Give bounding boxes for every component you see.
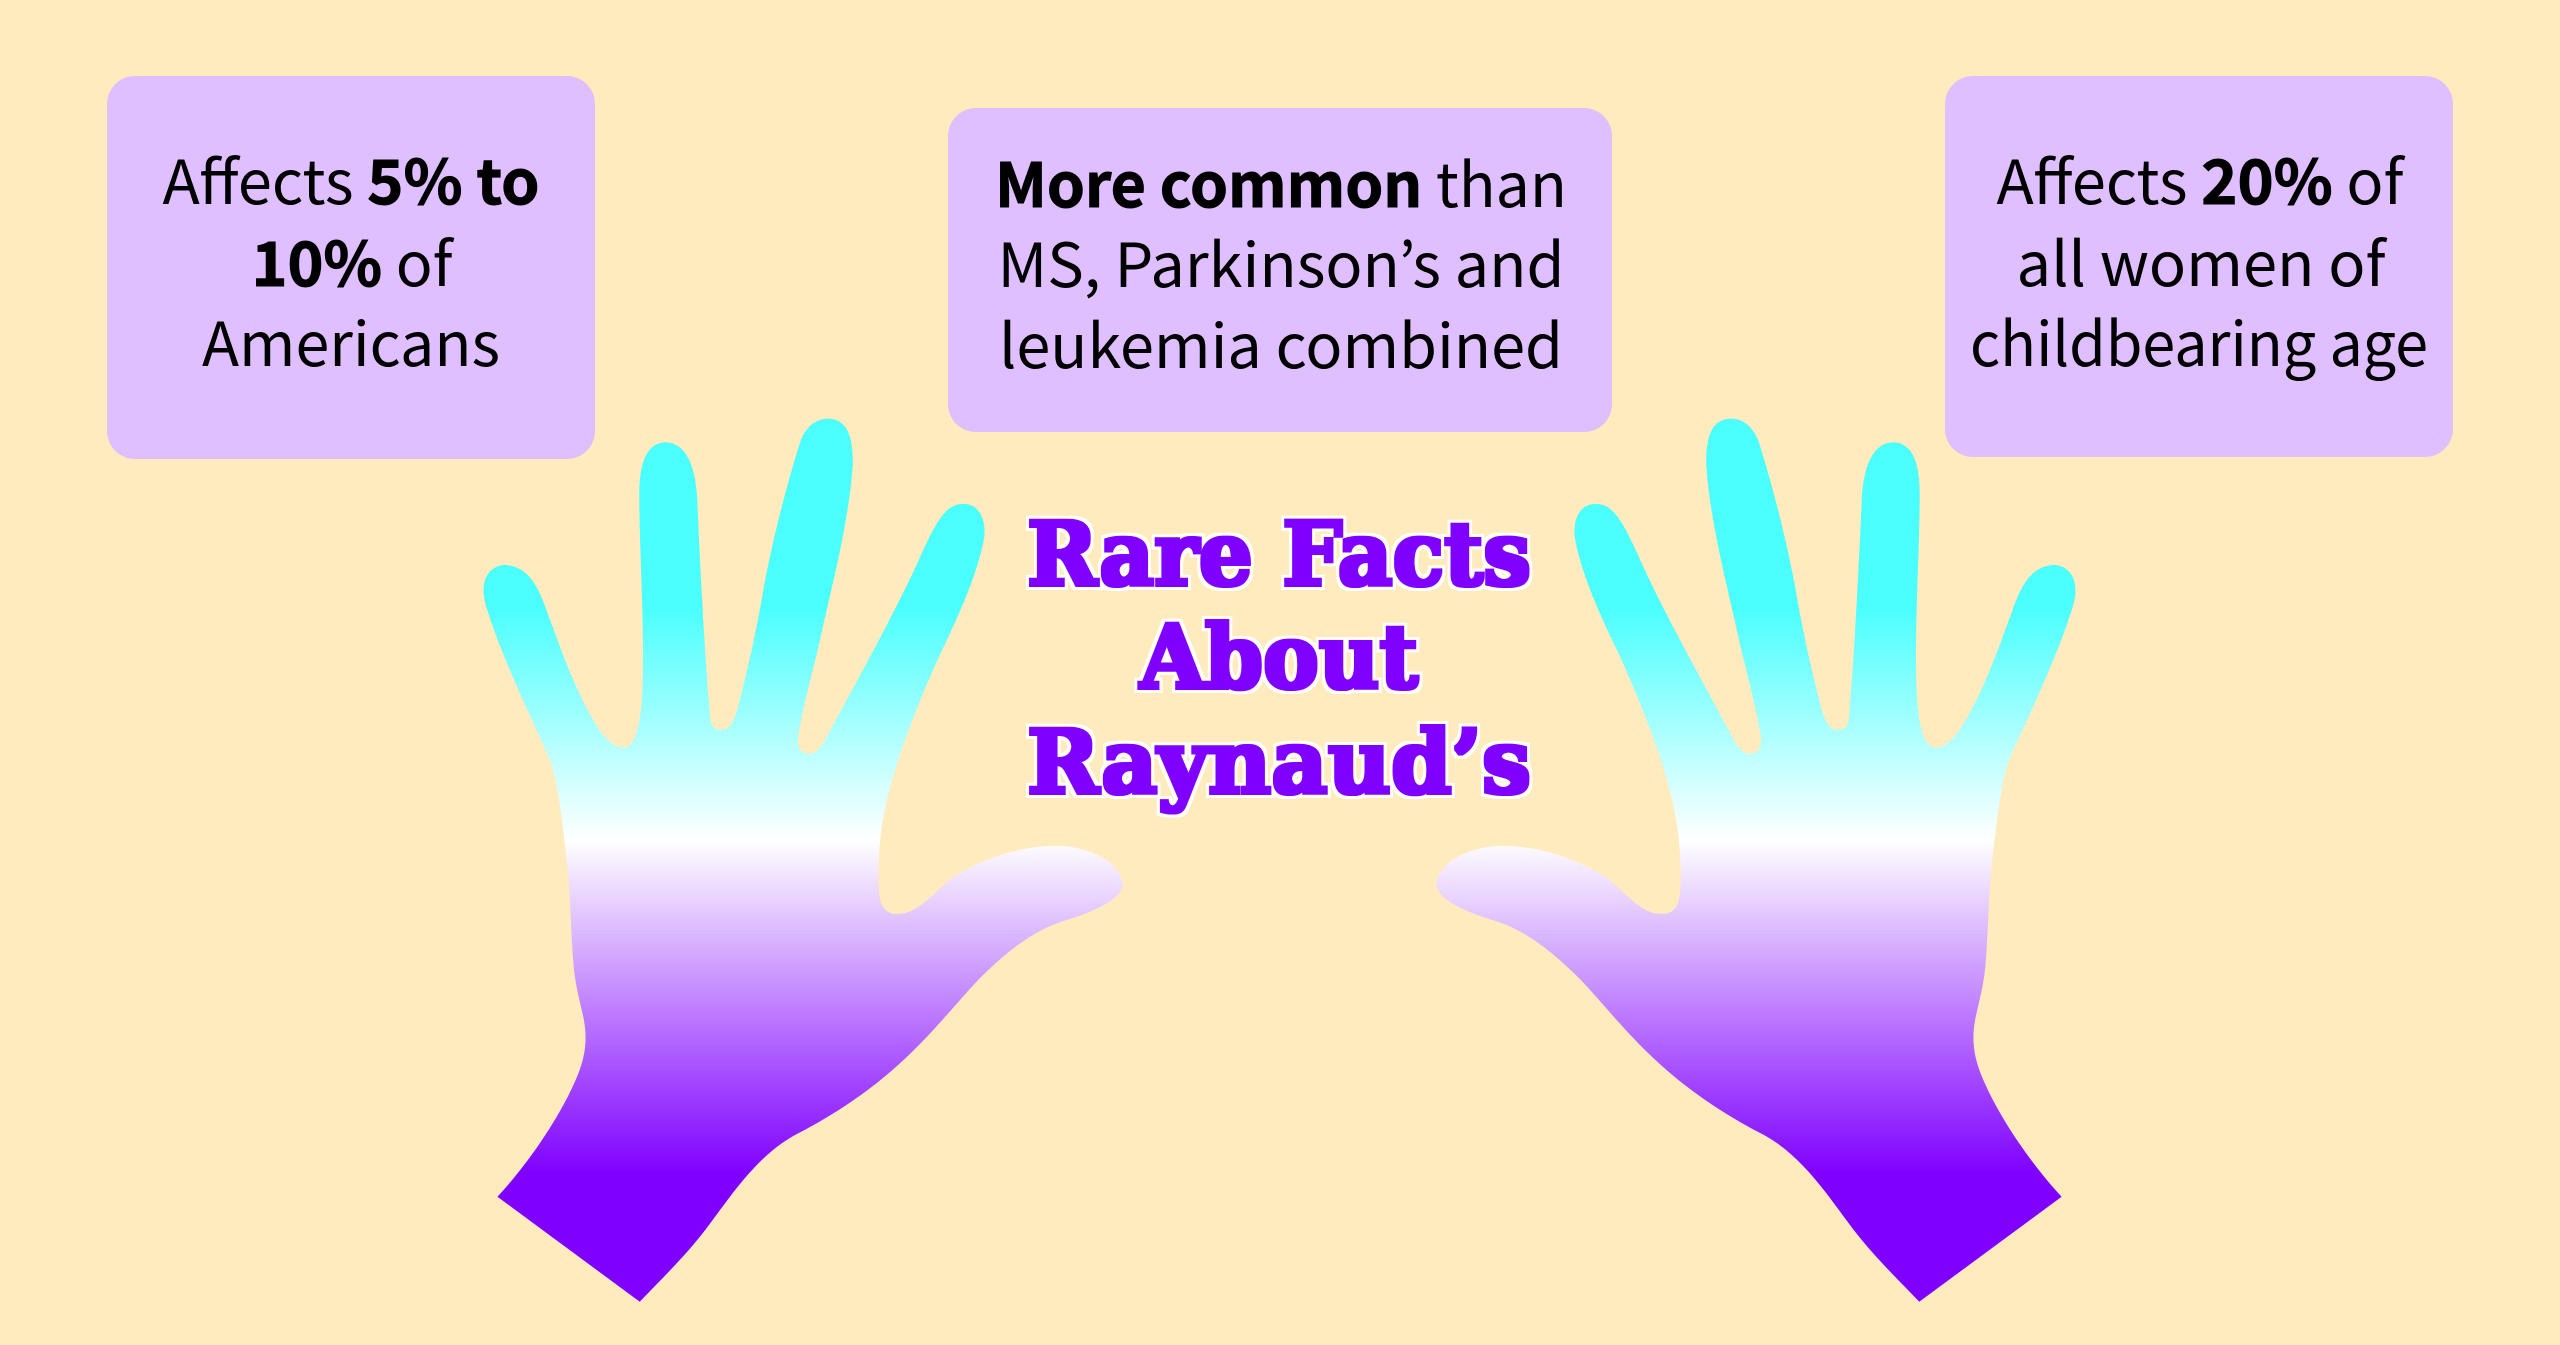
panel: right fact (1945, 76, 2453, 457)
panel: center fact: More common than (995, 136, 1567, 225)
panel: right fact: Affects 20% of (1996, 133, 2406, 222)
panel: left fact: Affects 5% to (162, 133, 540, 222)
icon: left hand (484, 419, 1123, 1302)
panel: right fact: all women of (2016, 215, 2388, 304)
panel: right fact: childbearing age (1970, 295, 2428, 384)
panel: left fact: 10% of (252, 215, 455, 304)
panel: center fact (948, 108, 1612, 432)
title: Rare Facts (1027, 502, 1531, 606)
panel: left fact (107, 76, 595, 459)
panel: left fact: Americans (202, 295, 500, 384)
panel: center fact: leukemia combined (999, 297, 1563, 386)
title: Raynaud’s (1027, 710, 1531, 814)
icon: right hand (1436, 419, 2075, 1302)
panel: center fact: MS, Parkinson’s and (998, 216, 1564, 305)
title: About (1139, 605, 1418, 709)
title (1027, 502, 1531, 814)
